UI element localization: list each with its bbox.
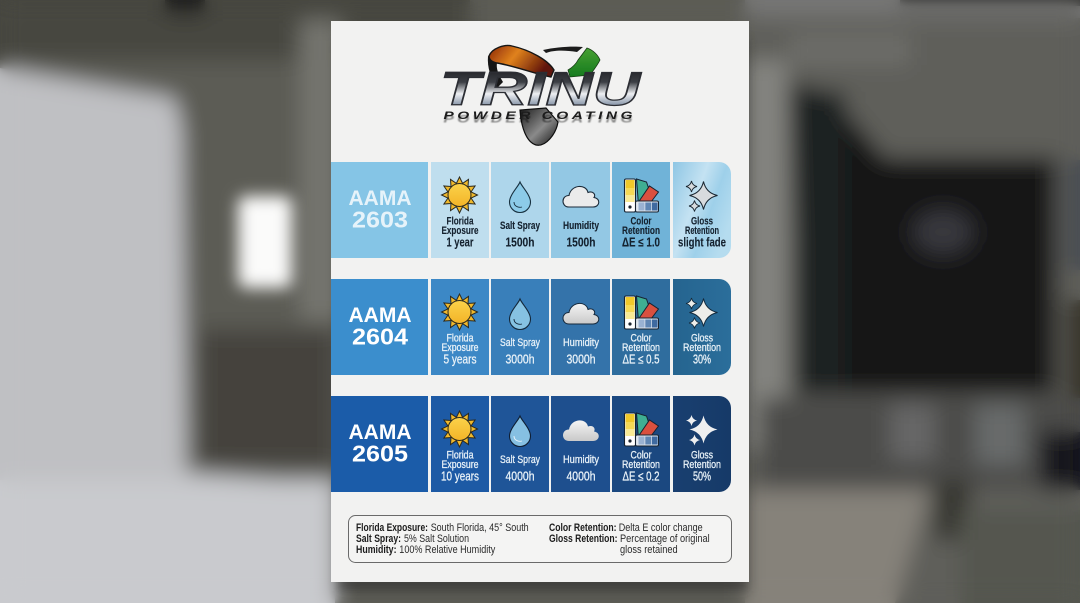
- legend box: 5% Salt Solution: [404, 533, 469, 545]
- Humidity cell: [551, 396, 610, 492]
- logo: TriNu Powder Coating: [440, 45, 641, 145]
- card shadow: [338, 40, 748, 591]
- Gloss Retention cell: Retention: [683, 459, 721, 471]
- legend box: 100% Relative Humidity: [399, 544, 496, 556]
- Gloss Retention cell: Gloss: [691, 450, 713, 462]
- Salt Spray cell: Salt Spray: [500, 337, 540, 349]
- Gloss Retention cell: [673, 396, 731, 492]
- AAMA 2604 label: 2604: [352, 324, 408, 350]
- Humidity cell: 3000h: [566, 352, 596, 366]
- legend box: Salt Spray:: [356, 533, 401, 545]
- Color Retention cell: Color: [630, 216, 652, 228]
- Gloss Retention cell: Gloss: [691, 332, 713, 344]
- Color Retention cell: Color: [630, 332, 652, 344]
- legend box: South Florida, 45° South: [431, 522, 529, 534]
- AAMA 2605 label: 2605: [352, 440, 408, 466]
- Florida Exposure cell: [431, 279, 489, 375]
- Color Retention cell: ΔE ≤ 1.0: [622, 235, 660, 249]
- Humidity cell: [551, 279, 610, 375]
- Gloss Retention cell: Retention: [685, 225, 719, 237]
- AAMA 2603 label: [331, 162, 428, 258]
- Color Retention cell: [612, 162, 670, 258]
- AAMA 2604 label: [331, 279, 428, 375]
- Salt Spray cell: 3000h: [506, 352, 535, 366]
- Gloss Retention cell: slight fade: [678, 235, 726, 249]
- Florida Exposure cell: Florida: [446, 450, 474, 462]
- Humidity cell: Humidity: [563, 220, 600, 232]
- Color Retention cell: [612, 279, 670, 375]
- Florida Exposure cell: [431, 396, 489, 492]
- Humidity cell: Humidity: [563, 337, 599, 349]
- Salt Spray cell: 4000h: [506, 469, 535, 483]
- Gloss Retention cell: 30%: [693, 352, 711, 366]
- Florida Exposure cell: Exposure: [442, 225, 478, 237]
- Humidity cell: 4000h: [566, 469, 596, 483]
- Florida Exposure cell: Exposure: [442, 459, 478, 471]
- Gloss Retention cell: [673, 279, 731, 375]
- legend box: Percentage of original: [620, 533, 710, 545]
- legend box: Delta E color change: [619, 522, 703, 534]
- Florida Exposure cell: Exposure: [442, 342, 478, 354]
- AAMA 2603 label: AAMA: [348, 186, 412, 210]
- legend box: gloss retained: [620, 544, 678, 556]
- legend box: Color Retention:: [549, 522, 616, 534]
- Color Retention cell: Retention: [622, 225, 660, 237]
- Color Retention cell: Retention: [622, 459, 660, 471]
- legend box: Gloss Retention:: [549, 533, 618, 545]
- Florida Exposure cell: Florida: [446, 216, 474, 228]
- Color Retention cell: [612, 396, 670, 492]
- Gloss Retention cell: Gloss: [691, 216, 713, 228]
- legend box: Humidity:: [356, 544, 396, 556]
- row: AAMA 2605: [331, 396, 731, 492]
- Gloss Retention cell: [673, 162, 731, 258]
- Color Retention cell: ΔE ≤ 0.5: [622, 352, 660, 366]
- Florida Exposure cell: 1 year: [446, 235, 474, 249]
- panel: white spec sheet: [331, 21, 749, 582]
- Humidity cell: Humidity: [563, 454, 599, 466]
- row: AAMA 2603: [331, 162, 731, 258]
- Florida Exposure cell: Florida: [446, 332, 474, 344]
- Salt Spray cell: [491, 279, 549, 375]
- Salt Spray cell: [491, 162, 549, 258]
- Salt Spray cell: Salt Spray: [500, 220, 541, 232]
- Gloss Retention cell: Retention: [683, 342, 721, 354]
- row: AAMA 2604: [331, 279, 731, 375]
- Salt Spray cell: 1500h: [506, 235, 534, 249]
- Salt Spray cell: Salt Spray: [500, 454, 540, 466]
- Florida Exposure cell: 5 years: [444, 352, 476, 366]
- legend box: Florida Exposure:: [356, 522, 428, 534]
- Color Retention cell: ΔE ≤ 0.2: [622, 469, 660, 483]
- logo swoosh emblem: [488, 45, 600, 145]
- AAMA 2605 label: [331, 396, 428, 492]
- Florida Exposure cell: [431, 162, 489, 258]
- AAMA 2604 label: AAMA: [348, 303, 412, 327]
- Salt Spray cell: [491, 396, 549, 492]
- Florida Exposure cell: 10 years: [441, 469, 479, 483]
- logo tagline: POWDER COATING: [444, 109, 632, 121]
- Color Retention cell: Color: [630, 450, 652, 462]
- Humidity cell: 1500h: [566, 235, 596, 249]
- logo wordmark: TRINU: [440, 62, 641, 115]
- Color Retention cell: Retention: [622, 342, 660, 354]
- AAMA 2605 label: AAMA: [348, 420, 412, 444]
- Humidity cell: [551, 162, 610, 258]
- Gloss Retention cell: 50%: [693, 469, 711, 483]
- AAMA 2603 label: 2603: [352, 206, 408, 232]
- legend box: [348, 516, 732, 562]
